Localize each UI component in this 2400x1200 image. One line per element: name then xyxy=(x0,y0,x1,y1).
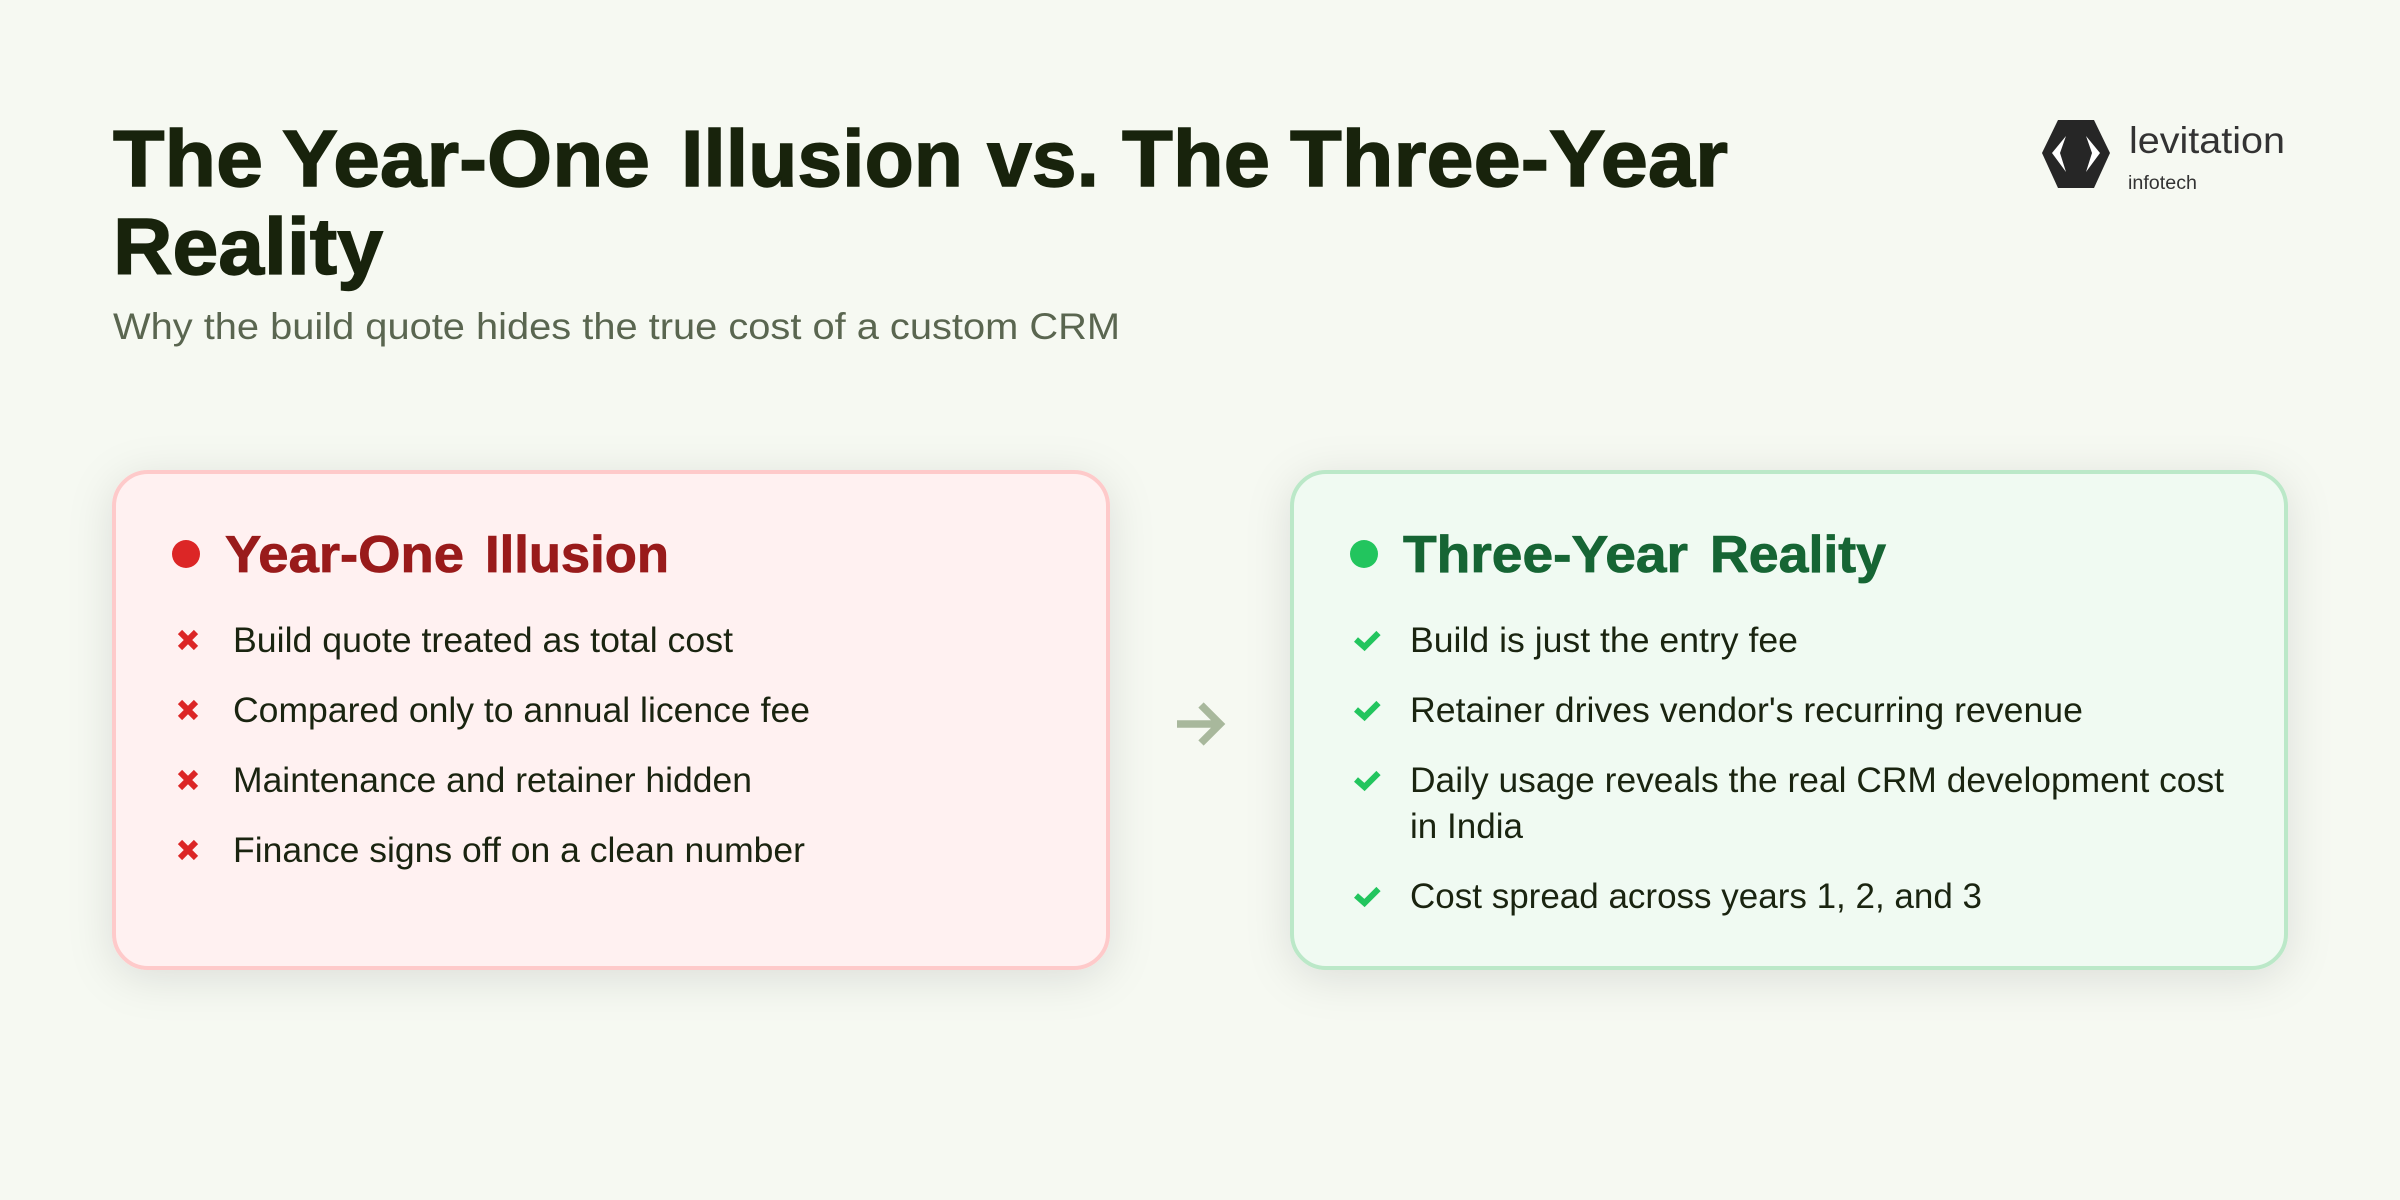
icon: green status dot xyxy=(1350,540,1378,568)
list item 2: Compared only to annual licence fee xyxy=(233,690,810,730)
list item 4: Cost spread across years 1, 2, and 3 xyxy=(1410,876,1982,916)
title: The xyxy=(1122,114,1270,203)
title: The xyxy=(113,114,263,203)
logo xyxy=(2042,120,2285,194)
title xyxy=(113,114,1728,291)
list item 3 xyxy=(1356,760,2224,846)
list item 4: Finance signs off on a clean number xyxy=(233,830,805,870)
title: vs. xyxy=(987,114,1099,203)
logo tagline: infotech xyxy=(2128,173,2197,194)
panel heading: Year-One xyxy=(225,526,464,584)
list item 2: Retainer drives vendor's recurring revenue xyxy=(1410,690,2083,730)
panel heading: Three-Year xyxy=(1403,526,1688,584)
panel: year-one illusion xyxy=(114,472,1108,968)
title: Reality xyxy=(113,202,384,291)
panel background xyxy=(1292,472,2286,968)
panel: three-year reality xyxy=(1292,472,2286,968)
subtitle: Why the build quote hides the true cost of a custom CRM xyxy=(113,306,1120,347)
list item 3: Daily usage reveals the real CRM development cost xyxy=(1410,760,2224,800)
panel background xyxy=(114,472,1108,968)
list item 3: in India xyxy=(1410,806,1523,846)
panel heading: Reality xyxy=(1710,526,1886,584)
logo wordmark: levitation xyxy=(2129,120,2285,161)
arrow xyxy=(1177,705,1220,743)
list item 1: Build is just the entry fee xyxy=(1410,620,1798,660)
icon: hexagon logo mark xyxy=(2042,120,2110,188)
title: Year-One xyxy=(282,114,650,203)
title: Illusion xyxy=(681,114,963,203)
title: Three-Year xyxy=(1290,114,1728,203)
icon: red status dot xyxy=(172,540,200,568)
panel heading: Illusion xyxy=(485,526,669,584)
list item 3: Maintenance and retainer hidden xyxy=(233,760,752,800)
list item 1: Build quote treated as total cost xyxy=(233,620,733,660)
